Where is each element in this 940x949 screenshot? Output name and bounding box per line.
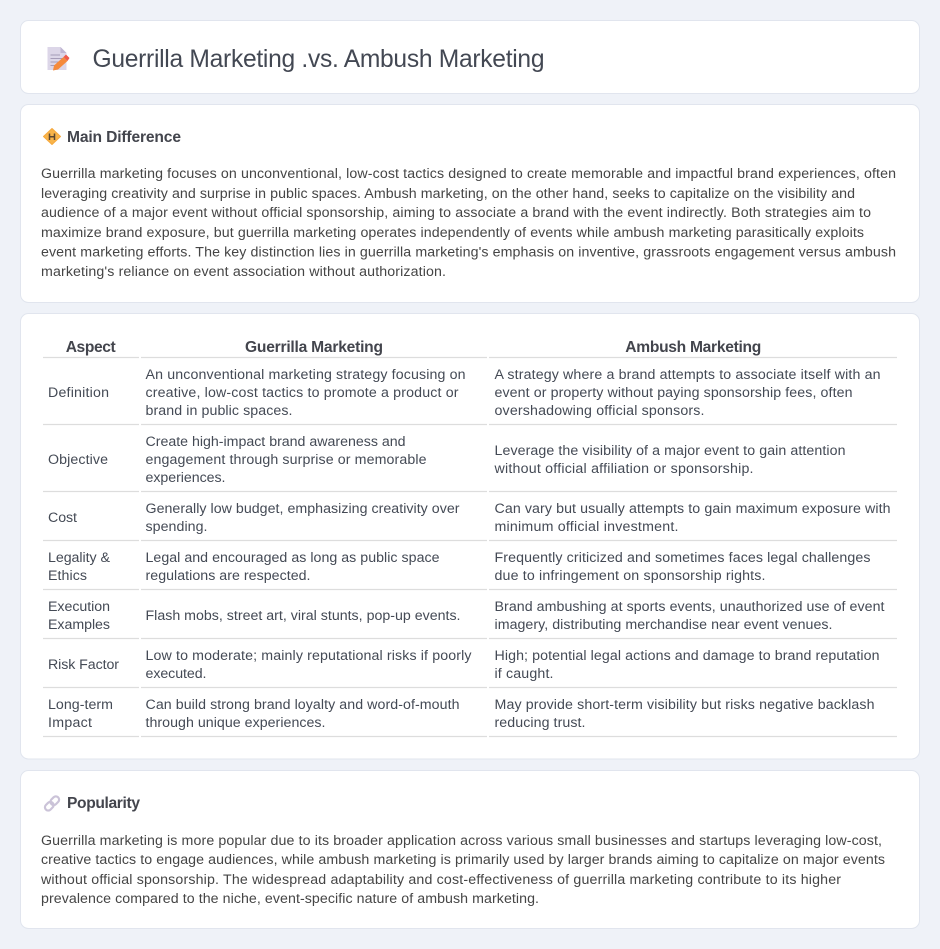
icon: chain link bbox=[44, 795, 60, 812]
text block: popularity bbox=[40, 833, 885, 907]
panel: title header bbox=[20, 20, 920, 94]
table header row: Guerrilla Marketing bbox=[245, 339, 383, 356]
table row: objective: experiences. bbox=[146, 470, 226, 486]
table row: legality and ethics: Frequently criticized and sometimes faces legal challenges bbox=[494, 550, 870, 566]
table row: cost: Cost bbox=[48, 510, 77, 526]
table row: legality and ethics: Ethics bbox=[48, 568, 87, 584]
table row: definition: An unconventional marketing strategy focusing on bbox=[146, 367, 466, 383]
table row: execution examples: Execution bbox=[48, 599, 110, 615]
table row: risk factor: if caught. bbox=[494, 666, 554, 682]
table row: long-term impact: Long-term bbox=[48, 697, 113, 713]
table row: objective bbox=[48, 434, 846, 486]
text block: main difference: maximize brand exposure, but guerrilla marketing operates independently of events while ambush marketing parasitically exploits bbox=[41, 225, 864, 241]
table row: long-term impact: May provide short-term visibility but risks negative backlash bbox=[494, 697, 874, 713]
text block: main difference: Guerrilla marketing focuses on unconventional, low-cost tactics designed to create memorable and impactful brand experiences, often bbox=[41, 166, 896, 182]
table row: objective: Create high-impact brand awareness and bbox=[146, 434, 406, 450]
table row: cost: Can vary but usually attempts to gain maximum exposure with bbox=[494, 501, 890, 517]
table row: long-term impact: reducing trust. bbox=[494, 715, 586, 731]
table row: execution examples: imagery, distributing merchandise near event venues. bbox=[494, 617, 832, 633]
table header row bbox=[66, 339, 761, 356]
table row: risk factor: Low to moderate; mainly reputational risks if poorly bbox=[146, 648, 472, 664]
table row: legality and ethics: regulations are respected. bbox=[146, 568, 310, 584]
table row: execution examples: Examples bbox=[48, 617, 110, 633]
table row: long-term impact: through unique experiences. bbox=[146, 715, 326, 731]
table row: objective: engagement through surprise or memorable bbox=[146, 452, 427, 468]
table row: long-term impact bbox=[48, 697, 874, 731]
table row: legality and ethics: due to infringement on sponsorship rights. bbox=[494, 568, 766, 584]
table row: long-term impact: Can build strong brand loyalty and word-of-mouth bbox=[146, 697, 460, 713]
table row: risk factor: executed. bbox=[146, 666, 206, 682]
table row: cost: minimum official investment. bbox=[494, 519, 678, 535]
table row: objective: Objective bbox=[48, 452, 108, 468]
panel: main difference bbox=[20, 104, 920, 302]
table row: risk factor bbox=[48, 648, 880, 682]
table row: objective: without official affiliation or sponsorship. bbox=[494, 461, 754, 477]
text block: main difference: marketing's reliance on event association without authorization. bbox=[41, 264, 446, 280]
table row: execution examples bbox=[48, 599, 885, 633]
heading: main difference: Main Difference bbox=[67, 129, 181, 146]
table row: risk factor: Risk Factor bbox=[48, 657, 119, 673]
text block: main difference: leveraging creativity and surprise in public spaces. Ambush marketing, on the other hand, seeks to capitalize on the visibility and bbox=[41, 186, 855, 202]
table row: definition bbox=[48, 367, 880, 419]
table row: objective: Leverage the visibility of a major event to gain attention bbox=[494, 443, 846, 459]
table row: legality and ethics: Legal and encouraged as long as public space bbox=[146, 550, 440, 566]
table row: cost: Generally low budget, emphasizing creativity over bbox=[146, 501, 460, 517]
table row: legality and ethics: Legality & bbox=[48, 550, 111, 566]
table row: definition: Definition bbox=[48, 385, 109, 401]
table row: definition: brand in public spaces. bbox=[146, 403, 292, 419]
table row: legality and ethics bbox=[48, 550, 870, 584]
table row: execution examples: Flash mobs, street art, viral stunts, pop-up events. bbox=[146, 608, 460, 624]
text block: main difference: event marketing efforts. The key distinction lies in guerrilla marketing's emphasis on inventive, grassroots engagement versus ambush bbox=[41, 244, 896, 260]
panel: comparison table bbox=[20, 314, 920, 759]
table row: definition: event or property without paying sponsorship fees, often bbox=[494, 385, 852, 401]
table row: execution examples: Brand ambushing at sports events, unauthorized use of event bbox=[494, 599, 885, 615]
text block: popularity: creative tactics to engage audiences, while ambush marketing is primarily used by larger brands aiming to capitalize on major events bbox=[41, 852, 885, 868]
text block: main difference: audience of a major event without official sponsorship, aiming to associate a brand with the event indirectly. Both strategies aim to bbox=[41, 205, 871, 221]
table row: long-term impact: Impact bbox=[48, 715, 92, 731]
icon: document with pencil bbox=[48, 47, 70, 70]
table row: cost bbox=[48, 501, 890, 535]
table row: definition: A strategy where a brand attempts to associate itself with an bbox=[494, 367, 880, 383]
table row: definition: overshadowing official sponsors. bbox=[494, 403, 704, 419]
panel: popularity bbox=[20, 770, 920, 928]
text block: popularity: prevalence compared to the niche, event-specific nature of ambush marketing. bbox=[41, 891, 539, 907]
table row: cost: spending. bbox=[146, 519, 208, 535]
text block: main difference bbox=[41, 166, 896, 280]
table row: definition: creative, low-cost tactics to promote a product or bbox=[146, 385, 459, 401]
table header row: Ambush Marketing bbox=[625, 339, 761, 356]
table header row: Aspect bbox=[66, 339, 116, 356]
text block: popularity: without official sponsorship. The widespread adaptability and cost-effectiveness of guerrilla marketing contribute to its higher bbox=[40, 872, 841, 888]
table row: risk factor: High; potential legal actions and damage to brand reputation bbox=[494, 648, 880, 664]
heading: popularity: Popularity bbox=[67, 795, 140, 812]
title: Guerrilla Marketing .vs. Ambush Marketing bbox=[92, 46, 544, 73]
text block: popularity: Guerrilla marketing is more popular due to its broader application across various small businesses and startups leveraging low-cost, bbox=[41, 833, 882, 849]
icon: orange diamond sign bbox=[44, 128, 60, 144]
